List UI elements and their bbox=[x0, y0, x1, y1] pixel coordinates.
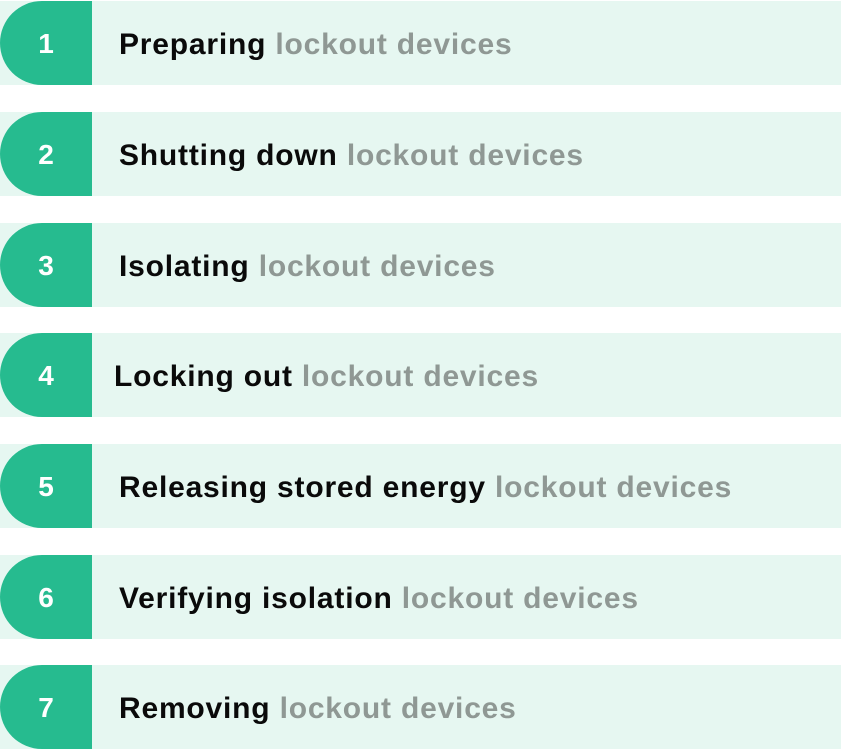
number badge 6: 6 bbox=[38, 582, 54, 613]
number badge 7 bbox=[0, 665, 92, 749]
number badge 1: 1 bbox=[38, 28, 54, 59]
label 5: Releasing stored energy lockout devices bbox=[119, 471, 732, 504]
step 7 bbox=[0, 665, 841, 749]
step 4 bbox=[0, 333, 841, 417]
label 3: Isolating lockout devices bbox=[119, 250, 496, 283]
number badge 3: 3 bbox=[38, 250, 54, 281]
number badge 4: 4 bbox=[38, 360, 54, 391]
step 3 bbox=[0, 223, 841, 307]
number badge 5 bbox=[0, 444, 92, 528]
number badge 1 bbox=[0, 1, 92, 85]
step 1 bbox=[0, 1, 841, 85]
label 2: Shutting down lockout devices bbox=[119, 139, 584, 172]
label 4: Locking out lockout devices bbox=[114, 360, 539, 393]
number badge 4 bbox=[0, 333, 92, 417]
step 6 bbox=[0, 555, 841, 639]
number badge 7: 7 bbox=[38, 692, 54, 723]
number badge 3 bbox=[0, 223, 92, 307]
number badge 2 bbox=[0, 112, 92, 196]
number badge 5: 5 bbox=[38, 471, 54, 502]
label 7: Removing lockout devices bbox=[119, 692, 517, 725]
label 1: Preparing lockout devices bbox=[119, 28, 512, 61]
step 5 bbox=[0, 444, 841, 528]
label 6: Verifying isolation lockout devices bbox=[119, 582, 639, 615]
number badge 6 bbox=[0, 555, 92, 639]
step 2 bbox=[0, 112, 841, 196]
number badge 2: 2 bbox=[38, 139, 54, 170]
